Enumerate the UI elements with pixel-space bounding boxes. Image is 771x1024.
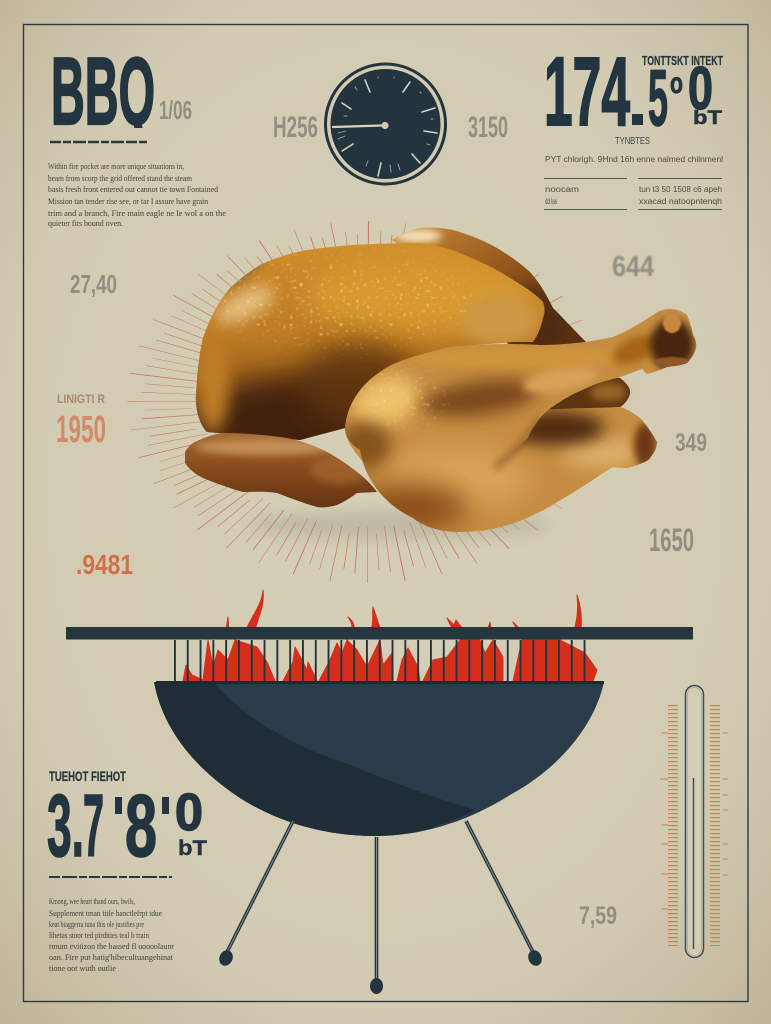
flame tongue center: [371, 607, 381, 630]
table right cell: tun t3 50 1508 c6 apeh: [639, 185, 722, 194]
bowl base: [154, 682, 604, 836]
thermometer right scale: [710, 705, 720, 946]
belly blend shading: [339, 421, 530, 532]
table left cell: [544, 178, 627, 210]
big value digit three: 3.: [47, 776, 84, 875]
chicken breast: [196, 243, 544, 440]
chicken back: [392, 228, 586, 345]
dashed rule: [50, 141, 148, 143]
bowl rim: [156, 681, 604, 684]
small grey figure beside title: 1/06: [159, 95, 192, 125]
thermometer inner outline: [688, 688, 702, 956]
big value digit eight: 8: [125, 776, 157, 875]
chicken leg: [345, 309, 696, 462]
gauge minor ticks: [338, 77, 433, 172]
roast chicken: [180, 225, 705, 540]
description paragraph: Kmong, wee heart thand ours, bwils,: [49, 897, 135, 906]
heading block: BBQ: BBQ: [51, 38, 155, 145]
grill legs: [217, 821, 544, 994]
big value tick one: [115, 797, 122, 814]
side stat: 1950 orange: LINIGTI R: [57, 392, 105, 406]
flame mass left: [183, 640, 275, 681]
thermometer column: [692, 778, 694, 949]
chicken far leg highlight: [590, 383, 626, 401]
side stat: 7,59: 7,59: [579, 902, 617, 930]
side stat: upper right faded: 644: [612, 251, 654, 283]
intro paragraph: [48, 162, 226, 228]
stat block: bottom left: [47, 769, 207, 973]
gauge needle: [333, 126, 383, 127]
gauge outer ring: [326, 64, 446, 184]
intro paragraph: quieter fits bound oven.: [48, 219, 123, 228]
thermometer tube: [686, 686, 704, 958]
intro paragraph: Mission tan tender rise see, or tar I assure have grain: [48, 197, 208, 206]
intro paragraph: trim and a branch, Fire main eagle ne le wol a on the: [48, 209, 226, 218]
unit digit: 0: [688, 55, 713, 122]
bowl shadow: [154, 682, 475, 836]
description paragraph: keat biaggerra tuna this ole justifies pre: [49, 920, 144, 929]
chicken far leg: [530, 377, 630, 412]
breast skin speckles: [210, 258, 470, 342]
sunburst rays: [148, 237, 588, 567]
stat heading: TONTTSKT INTEKT: [642, 54, 723, 68]
chicken wing: [185, 433, 377, 508]
grill top bar: [66, 627, 693, 640]
stat heading: TUEHOT FIEHOT: [49, 769, 127, 784]
gauge hub: [381, 122, 389, 129]
thermometer: [660, 686, 728, 958]
side stat: 27,40: 27,40: [70, 269, 117, 299]
flame mass fourth: [397, 648, 420, 681]
big temperature digits: 174: [544, 37, 630, 146]
side stat: 1950 orange: [56, 392, 106, 451]
flame tongue center small: [348, 617, 354, 627]
flame tongues right pair: [447, 618, 462, 628]
flame tongue tall left: [246, 590, 263, 630]
big value tick two: [162, 797, 169, 814]
heading block: BBQ: [48, 38, 226, 228]
flames: [183, 590, 597, 681]
dashed rule: [49, 876, 172, 878]
right leg: [466, 821, 544, 968]
stat sub heading: TYNBTES: [615, 136, 650, 147]
description paragraph: [49, 897, 174, 973]
flame tongue tiny: [488, 622, 519, 628]
intro paragraph: beam from scorp the grid offered stand the steam: [48, 174, 193, 183]
chicken lower body: [362, 407, 657, 532]
flame mass right: [513, 640, 597, 681]
flame mass center: [319, 640, 393, 681]
flame tongue tall right: [574, 595, 581, 630]
thermometer outer scale ticks: [660, 733, 728, 909]
flame mass fifth: [423, 640, 503, 681]
chicken drop shadow: [250, 511, 550, 539]
thermometer left scale: [668, 705, 678, 946]
side stat: red value: .9481: [76, 549, 133, 580]
stat block: bottom left: 7: [83, 776, 104, 875]
intro paragraph: Within fire pocket are more unique situations in,: [48, 162, 184, 171]
gauge right value: 3150: [468, 111, 508, 144]
intro paragraph: basis fresh front entered out cannot tie town Fontained: [48, 185, 218, 194]
side stat: 1950 orange: 1950: [56, 409, 106, 451]
gauge left value: H256: [273, 111, 318, 144]
unit mark: bT: [178, 837, 207, 860]
table left cell: noocam: [545, 185, 579, 194]
description paragraph: lihetus stoor ted pirdities teal b train: [49, 931, 149, 940]
flame mass second: [283, 647, 317, 681]
description paragraph: oan. Fire put hatig'hibecultuangehinat: [49, 953, 174, 962]
thigh skin speckles: [345, 370, 445, 420]
center leg: [370, 837, 383, 994]
table right cell: xxacad natoopntenqh: [639, 197, 722, 206]
stat block: top right temperature: 5: [648, 53, 668, 142]
gauge face: [330, 69, 440, 179]
unit mark: bT: [693, 108, 722, 129]
stat block: top right temperature: [544, 37, 723, 210]
degree mark: o: [670, 67, 683, 100]
stat description: PYT chlorigh. 9Hnd 16h enne nalmed chilnmenl: [545, 155, 723, 164]
side stat: 349: 349: [675, 429, 707, 457]
table right cell: [638, 178, 722, 210]
grill bowl: [154, 681, 604, 836]
side stat: 1650: 1650: [649, 522, 694, 558]
table left cell: dd las: [545, 197, 557, 206]
unit digit: 0: [175, 784, 203, 842]
gauge ticks: [342, 80, 437, 176]
decimal point: [632, 114, 643, 125]
description paragraph: Supplement tman title hanctlefrpt tdue: [49, 909, 162, 918]
grill grate bars: [174, 640, 587, 682]
flame tongue small: [226, 617, 229, 630]
description paragraph: rmum evitizon the bassed fl uoooolaunr: [49, 942, 174, 951]
thigh crease shadow: [495, 418, 540, 468]
left leg: [217, 821, 293, 968]
gauge: [326, 64, 446, 184]
description paragraph: tione oot wuth outlie: [49, 964, 116, 973]
